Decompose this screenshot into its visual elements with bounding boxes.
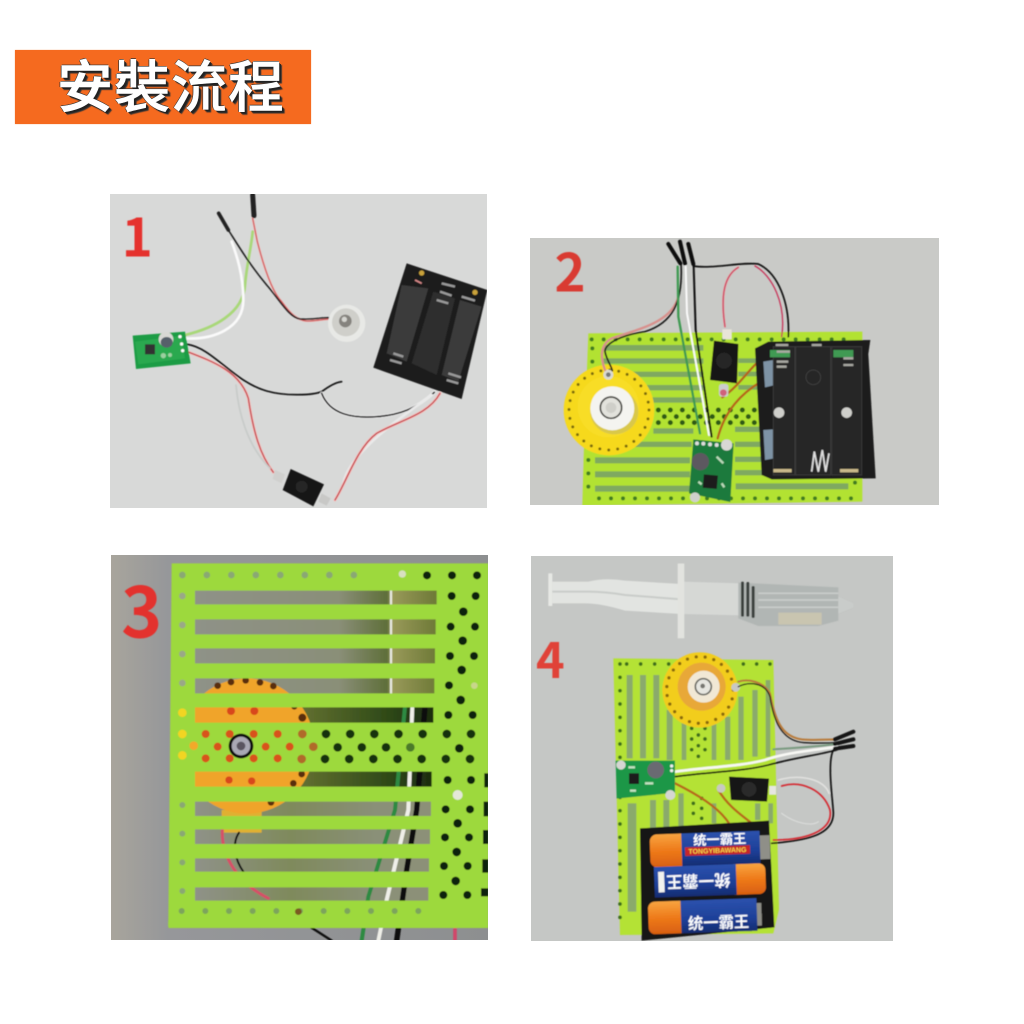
- step number 4: 4: [536, 623, 565, 693]
- battery one: TONGYIBAWANG: [688, 847, 747, 856]
- battery holder: [373, 263, 487, 399]
- panel: step 4 with syringe and batteries: [531, 556, 893, 941]
- orange wheel behind board: [194, 678, 310, 834]
- panel: step 2 mounted on board: [530, 231, 939, 505]
- wires behind board: [222, 590, 455, 941]
- panel: step 1 parts laid out: [110, 194, 487, 508]
- tinted slot backgrounds: [192, 588, 445, 903]
- push switch: [273, 469, 331, 506]
- title banner: [15, 50, 311, 124]
- circuit board: [133, 332, 191, 369]
- battery holder: [755, 340, 876, 479]
- circuit board: [616, 760, 675, 800]
- wires to connectors: [185, 195, 330, 338]
- heading: installation process: 安裝流程: [57, 43, 285, 124]
- lime board with slots: [168, 563, 488, 928]
- yellow wheel with atomiser: [662, 652, 740, 728]
- step number 2: 2: [554, 231, 586, 307]
- syringe: [548, 563, 853, 638]
- battery one: 统一霸王: [693, 830, 747, 848]
- right column holes: [423, 571, 488, 899]
- push switch: [717, 777, 776, 802]
- panel: step 3 back of board: [111, 555, 488, 941]
- battery two: 统一霸王: [666, 870, 731, 891]
- step number 3: 3: [121, 558, 162, 658]
- yellow wheel with atomiser disc: [564, 365, 654, 455]
- battery three: 统一霸王: [688, 913, 750, 933]
- lime board: [613, 658, 779, 935]
- green perforated board: [582, 332, 862, 505]
- step number 1: 1: [122, 196, 153, 272]
- wires from connectors: [602, 242, 788, 438]
- circuit board: [689, 439, 734, 502]
- battery one: [649, 829, 771, 868]
- board holes: [182, 575, 472, 911]
- battery holder with three batteries: [640, 821, 774, 941]
- wires to switch and battery: [187, 344, 440, 500]
- wires from wheel and board to connectors: [675, 680, 853, 843]
- slide switch: [710, 329, 738, 397]
- ultrasonic disc: [328, 305, 365, 342]
- mounting screw: [229, 734, 253, 758]
